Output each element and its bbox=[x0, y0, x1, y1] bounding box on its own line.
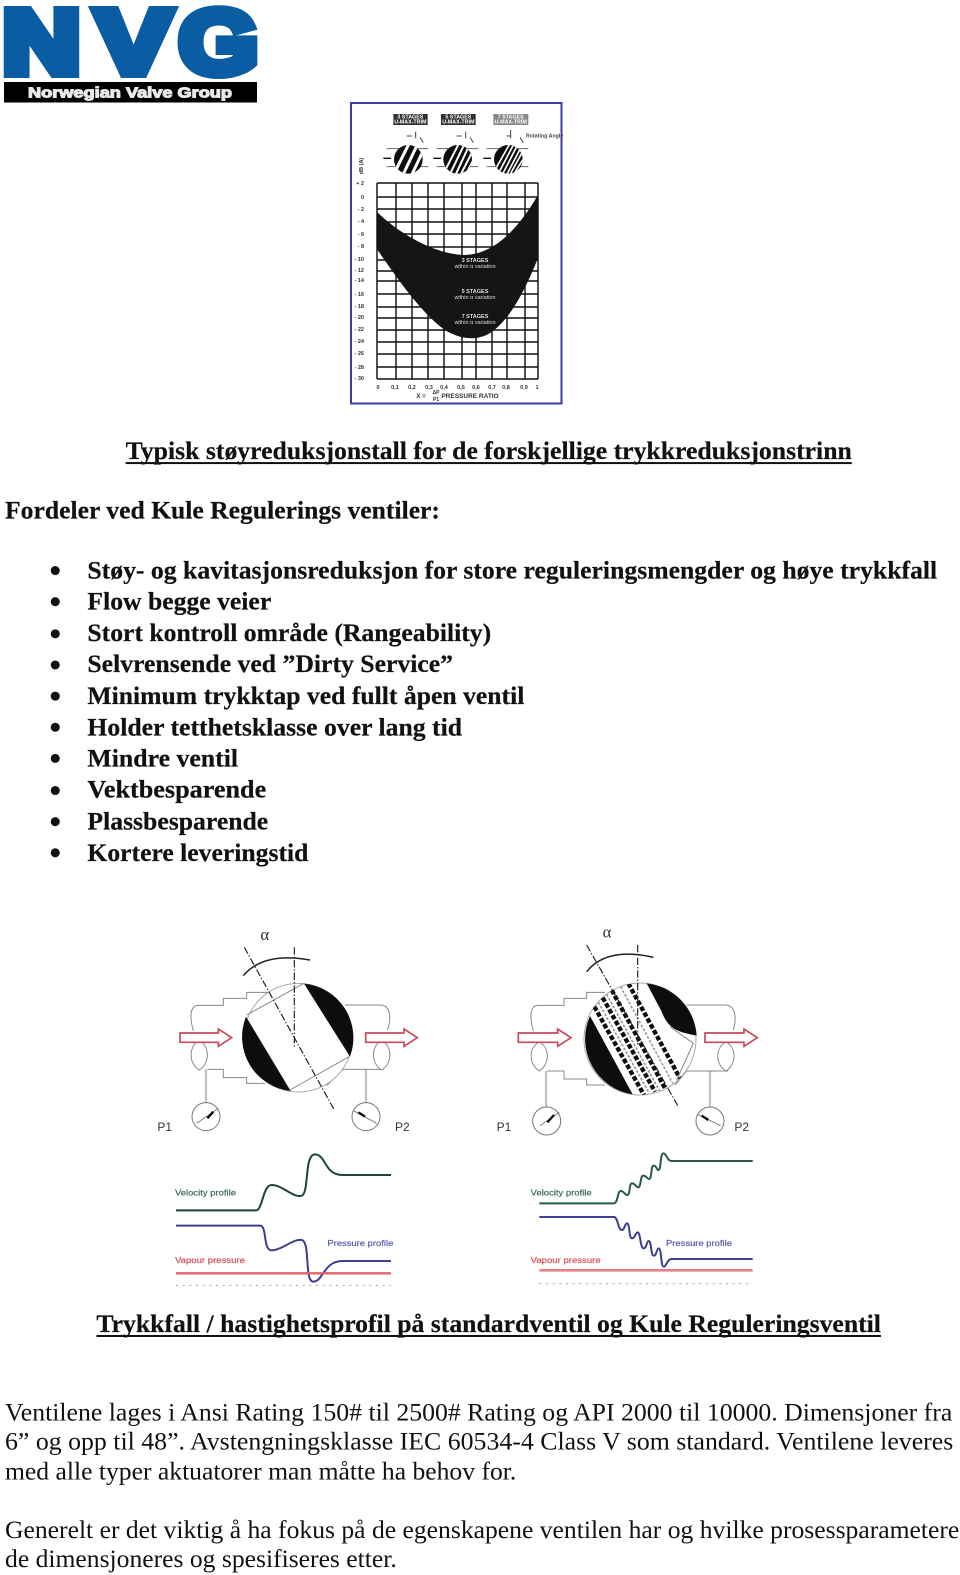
stage trim icons bbox=[383, 114, 563, 176]
x axis labels: 0,8 bbox=[502, 385, 510, 391]
stage labels in band bbox=[453, 258, 496, 326]
y axis labels: - 20 bbox=[355, 315, 364, 321]
alpha label: α bbox=[260, 925, 269, 944]
y axis labels: - 6 bbox=[358, 232, 364, 238]
paragraph: ratings and dimensions: Ventilene lages i Ansi Rating 150# til 2500# Rating og API 2000 til 10000. Dimensjoner fra bbox=[5, 1397, 953, 1426]
figure caption: noise reduction: Typisk støyreduksjonstall for de forskjellige trykkreduksjonstrinn bbox=[126, 436, 852, 465]
y axis labels: - 8 bbox=[358, 244, 364, 250]
black performance band bbox=[377, 195, 538, 338]
advantages bullet list: Vektbesparende bbox=[87, 775, 266, 804]
stage labels in band: 3 STAGES bbox=[462, 258, 489, 264]
y axis labels: dB (A) bbox=[359, 158, 365, 174]
outlet arrow control valve bbox=[705, 1029, 757, 1046]
y axis labels: - 24 bbox=[355, 339, 365, 345]
diagram: standard valve: P2 bbox=[395, 1120, 410, 1134]
paragraph: ratings and dimensions: 6” og opp til 48”. Avstengningsklasse IEC 60534-4 Class V som standard. Ventilene leveres bbox=[5, 1426, 953, 1455]
advantages bullet list: Støy- og kavitasjonsreduksjon for store reguleringsmengder og høye trykkfall bbox=[87, 556, 937, 585]
y axis labels: - 16 bbox=[355, 292, 364, 298]
stage trim icons: U-MAX-TRIM bbox=[394, 120, 427, 126]
stage trim icons: U-MAX-TRIM bbox=[442, 120, 475, 126]
x axis labels: X = bbox=[416, 394, 426, 400]
velocity label control valve: Velocity profile bbox=[531, 1188, 592, 1197]
chart grid bbox=[377, 183, 538, 379]
x axis labels: PRESSURE RATIO bbox=[441, 393, 499, 400]
axis ticks control valve bbox=[539, 1282, 753, 1285]
x axis labels: 0,5 bbox=[457, 385, 465, 391]
paragraph: ratings and dimensions: med alle typer aktuatorer man måtte ha behov for. bbox=[5, 1457, 516, 1486]
x axis labels: 0,6 bbox=[472, 385, 480, 391]
advantages bullet list: Minimum trykktap ved fullt åpen ventil bbox=[87, 681, 524, 710]
figure caption: pressure drop: Trykkfall / hastighetsprofil på standardventil og Kule Reguleringsventil bbox=[96, 1309, 881, 1338]
outlet arrow bbox=[366, 1029, 417, 1046]
paragraph: general focus bbox=[5, 1515, 959, 1573]
x axis labels: 0,9 bbox=[520, 385, 528, 391]
paragraph: general focus: Generelt er det viktig å ha fokus på de egenskapene ventilen har og hvilke prosessparametere bbox=[5, 1515, 959, 1544]
control valve flange ellipses bbox=[531, 1042, 734, 1071]
vapour label control valve: Vapour pressure bbox=[531, 1256, 601, 1265]
x axis labels bbox=[376, 385, 538, 401]
advantages bullet list: Holder tetthetsklasse over lang tid bbox=[87, 712, 462, 741]
velocity label: Velocity profile bbox=[175, 1188, 237, 1197]
y axis labels: - 4 bbox=[358, 219, 365, 225]
black band overlay bbox=[377, 195, 538, 338]
y axis labels: - 30 bbox=[355, 376, 364, 382]
y axis labels: - 26 bbox=[355, 351, 364, 357]
y axis labels bbox=[355, 158, 365, 382]
standard valve pipe outline bbox=[191, 992, 390, 1086]
stage trim icons: 7 STAGES bbox=[498, 115, 524, 121]
control valve axes bbox=[587, 945, 678, 1107]
stage trim icons: 3 STAGES bbox=[397, 115, 424, 121]
x axis labels: 0,1 bbox=[391, 385, 399, 391]
stage labels in band: within α variation bbox=[453, 264, 496, 270]
gauges bbox=[197, 1069, 377, 1123]
chart: control valve profiles bbox=[531, 1153, 753, 1284]
stage labels in band: within α variation bbox=[453, 320, 496, 326]
advantages bullet list: Plassbesparende bbox=[87, 807, 268, 836]
y axis labels: - 14 bbox=[355, 278, 365, 284]
x axis labels: P1 bbox=[433, 397, 439, 403]
control valve ball bbox=[584, 983, 696, 1095]
caption underline bbox=[126, 462, 852, 464]
x axis labels: 0 bbox=[376, 385, 380, 391]
x axis labels: 0,2 bbox=[408, 385, 416, 391]
standard valve flange ellipses bbox=[191, 1040, 390, 1070]
chart: noise reduction vs pressure ratio bbox=[351, 103, 563, 404]
standard valve axes bbox=[244, 947, 334, 1110]
velocity curve bbox=[176, 1154, 391, 1210]
paragraph: ratings and dimensions bbox=[5, 1397, 953, 1486]
y axis labels: 0 bbox=[361, 195, 364, 201]
y axis labels: - 28 bbox=[355, 365, 364, 371]
inlet arrow control valve bbox=[518, 1029, 571, 1046]
gauges control valve bbox=[540, 1071, 721, 1126]
stage labels in band: 7 STAGES bbox=[462, 314, 489, 320]
velocity curve control valve bbox=[539, 1153, 753, 1203]
advantages bullet list bbox=[51, 556, 937, 867]
stage trim icons: Rotating Angle bbox=[526, 133, 563, 139]
logo: Norwegian Valve Group bbox=[2, 0, 258, 102]
pressure label control valve: Pressure profile bbox=[666, 1239, 733, 1248]
control valve angle arc bbox=[587, 954, 653, 972]
diagram: ball control valve bbox=[497, 923, 757, 1135]
advantages bullet list: Selvrensende ved ”Dirty Service” bbox=[87, 649, 453, 678]
pressure labels: P1 bbox=[157, 1120, 172, 1134]
inlet arrow bbox=[180, 1029, 232, 1046]
stage labels in band: 5 STAGES bbox=[462, 289, 489, 295]
chart frame bbox=[351, 103, 562, 404]
y axis labels: - 18 bbox=[355, 304, 364, 310]
advantages bullet list: Kortere leveringstid bbox=[87, 838, 308, 867]
heading: advantages: Fordeler ved Kule Regulerings ventiler: bbox=[5, 495, 440, 524]
y axis labels: - 10 bbox=[355, 257, 364, 263]
vapour pressure line control valve bbox=[539, 1266, 753, 1274]
advantages bullet list: Mindre ventil bbox=[87, 743, 238, 772]
caption underline 2 bbox=[96, 1335, 881, 1337]
logo letters NVG bbox=[2, 0, 258, 93]
stage trim icons: 5 STAGES bbox=[445, 115, 472, 121]
x axis labels: 0,7 bbox=[488, 385, 496, 391]
pressure labels control valve: P1 bbox=[497, 1120, 512, 1134]
logo black bar bbox=[4, 82, 257, 102]
standard valve angle arc bbox=[243, 958, 310, 976]
advantages bullet list: Stort kontroll område (Rangeability) bbox=[87, 618, 491, 647]
axis ticks bbox=[176, 1284, 391, 1287]
pressure curve bbox=[176, 1226, 391, 1282]
pressure label: Pressure profile bbox=[327, 1239, 394, 1248]
x axis labels: 1 bbox=[535, 385, 539, 391]
x axis labels: ΔP bbox=[433, 390, 440, 396]
stage trim icons: U-MAX-TRIM bbox=[495, 120, 527, 126]
pressure curve control valve bbox=[539, 1217, 753, 1267]
standard valve ball bbox=[244, 983, 353, 1092]
diagram: standard valve bbox=[157, 925, 417, 1134]
y axis labels: + 2 bbox=[356, 181, 364, 187]
logo tagline: Norwegian Valve Group bbox=[28, 86, 232, 102]
y axis labels: - 22 bbox=[355, 327, 364, 333]
chart: standard valve profiles bbox=[175, 1154, 394, 1285]
advantages bullet list: Flow begge veier bbox=[87, 587, 271, 616]
alpha label control valve: α bbox=[603, 923, 612, 942]
diagram: ball control valve: P2 bbox=[734, 1120, 749, 1134]
y axis labels: - 12 bbox=[355, 268, 364, 274]
x axis labels: 0,3 bbox=[425, 385, 433, 391]
paragraph: general focus: de dimensjoneres og spesifiseres etter. bbox=[5, 1544, 397, 1573]
vapour pressure line bbox=[176, 1270, 391, 1277]
control valve pipe outline bbox=[531, 992, 735, 1085]
stage labels in band: within α variation bbox=[453, 295, 496, 301]
x axis labels: 0,4 bbox=[440, 385, 449, 391]
y axis labels: - 2 bbox=[358, 207, 364, 213]
control valve trim channels bbox=[594, 983, 693, 1095]
vapour label: Vapour pressure bbox=[175, 1256, 246, 1265]
